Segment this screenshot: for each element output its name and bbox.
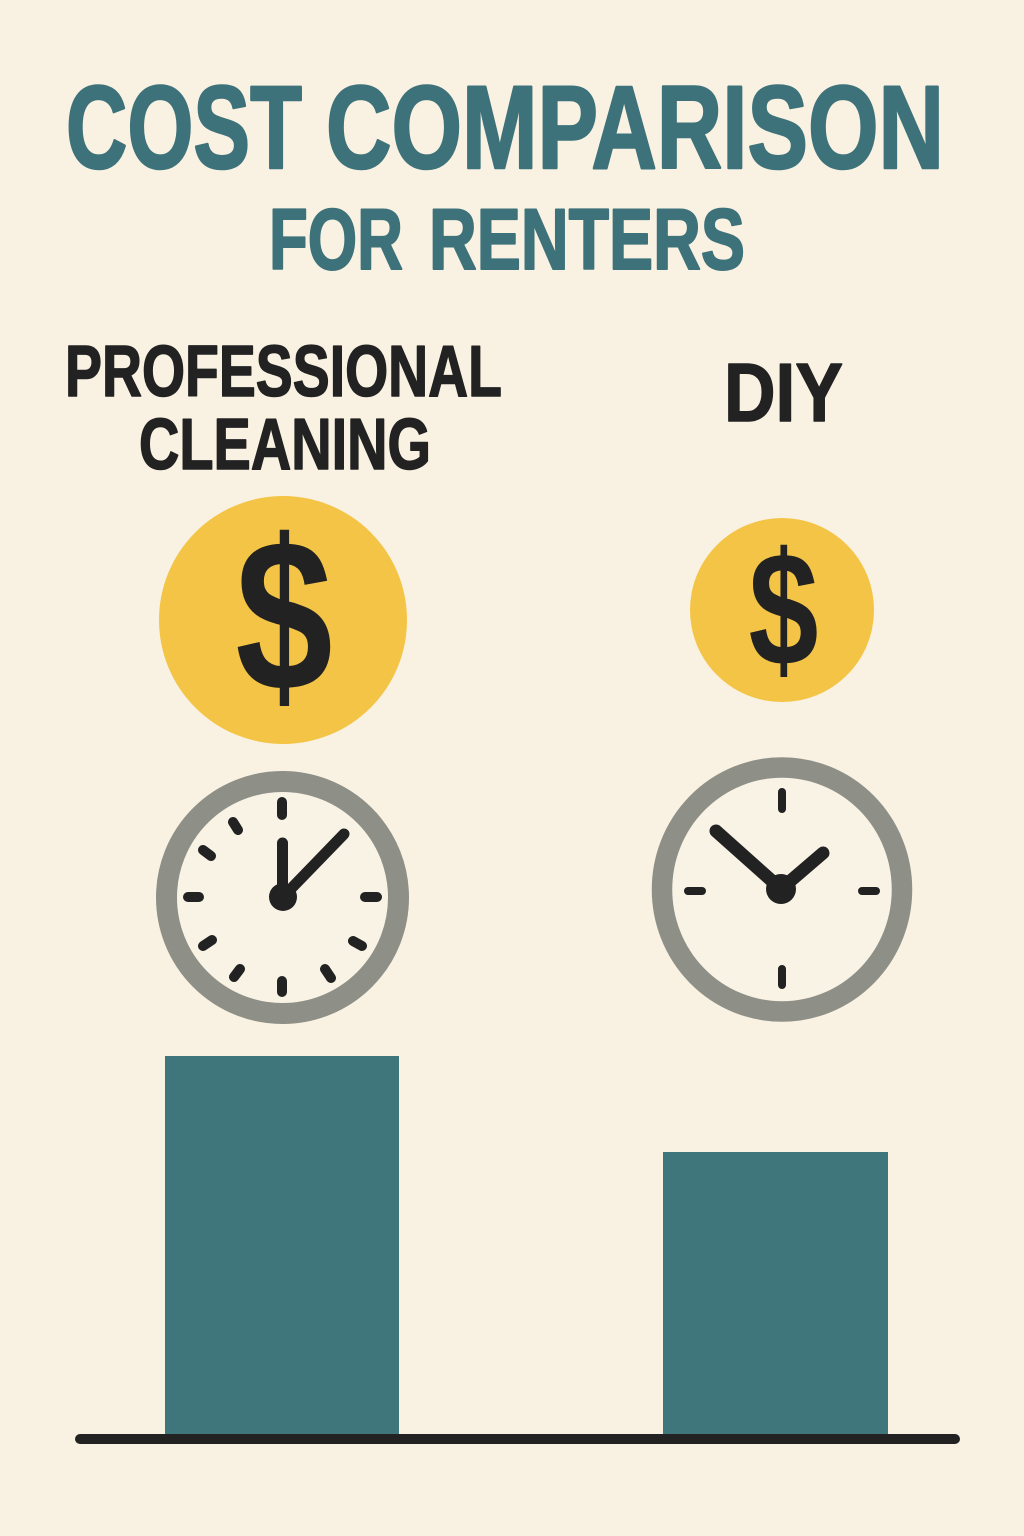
title [66,62,944,288]
heading: DIY: DIY [724,346,843,439]
heading: professional cleaning: CLEANING [139,405,431,485]
icon: small dollar coin [690,518,874,702]
bar: professional cost [165,1056,399,1438]
title: COST [66,62,302,194]
icon: small dollar coin: $ [749,519,818,700]
panel: professional cleaning [65,332,502,1438]
title: FOR [269,192,403,288]
heading: professional cleaning: PROFESSIONAL [65,332,502,412]
chart baseline [75,1434,960,1444]
panel: DIY [662,346,902,1438]
heading: professional cleaning [65,332,502,485]
bar: DIY cost [663,1152,888,1438]
icon: clock with many tick marks [166,782,398,1014]
icon: large dollar coin [159,494,407,744]
icon: large dollar coin: $ [235,494,333,736]
icon: clock with four tick marks [662,768,902,1012]
title: RENTERS [429,192,745,288]
